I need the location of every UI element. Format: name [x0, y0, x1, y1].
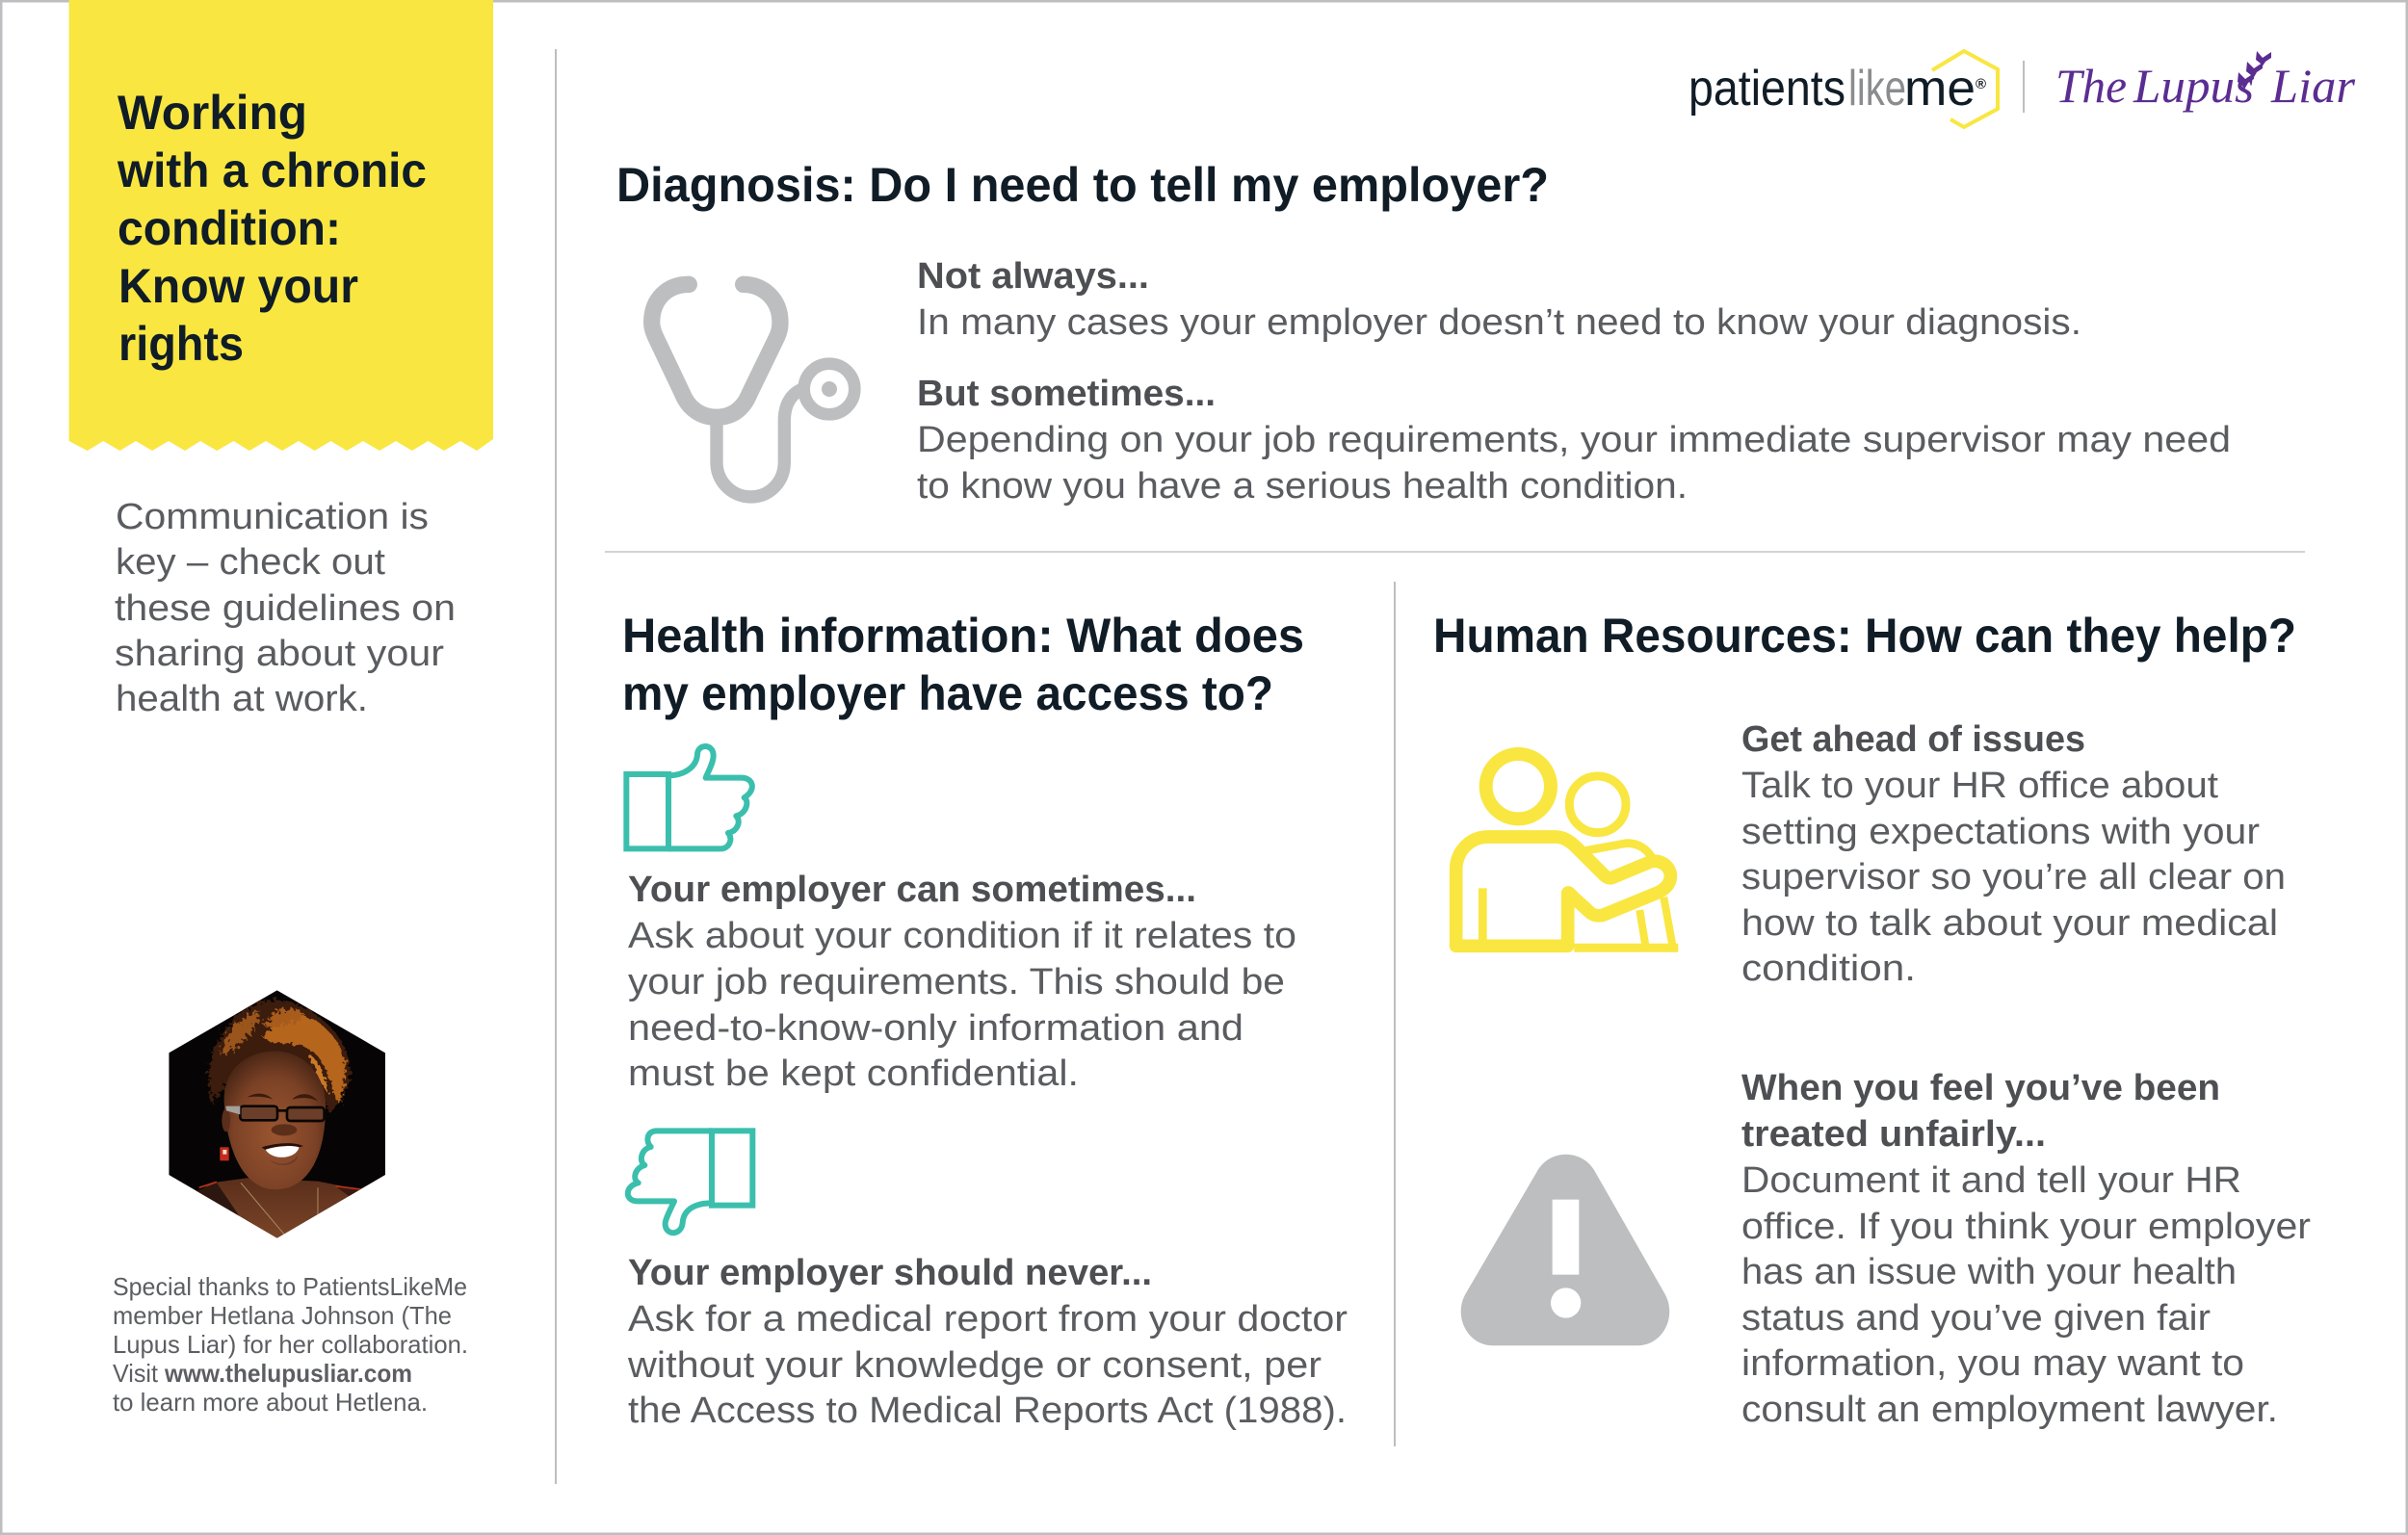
icon: thumbs up	[626, 746, 752, 848]
logo: The Lupus Liar: Liar	[2270, 59, 2356, 113]
title: Working	[118, 86, 307, 140]
text block: When you feel you've been treated unfairly: has an issue with your health	[1741, 1252, 2237, 1292]
heading: Health information: my employer have access to?	[622, 666, 1273, 720]
logo: PatientsLikeMe: patients	[1688, 61, 1845, 117]
icon: two people embracing	[1456, 754, 1678, 948]
logo: The Lupus Liar	[2055, 51, 2356, 113]
logo: PatientsLikeMe: like	[1848, 61, 1906, 117]
text block: Not always: Not always...	[917, 256, 1149, 297]
text block: But sometimes	[917, 374, 2231, 507]
text block: Your employer can sometimes: Your employer can sometimes...	[628, 870, 1196, 910]
logo: PatientsLikeMe	[1688, 51, 1998, 127]
text block: When you feel you've been treated unfairly: consult an employment lawyer.	[1741, 1390, 2278, 1430]
icon: warning triangle	[1461, 1155, 1669, 1345]
logo: The Lupus Liar: Lupus	[2133, 59, 2254, 113]
logo: PatientsLikeMe: ®	[1976, 76, 1986, 92]
intro text: health at work.	[116, 679, 368, 719]
text block: But sometimes: to know you have a serious health condition.	[917, 466, 1688, 507]
text block: Your employer should never: without your knowledge or consent, per	[627, 1345, 1322, 1386]
title: rights	[118, 317, 244, 371]
panel: yellow title banner	[69, 0, 493, 451]
text block: Your employer should never: Your employer should never...	[628, 1253, 1152, 1293]
text block: Get ahead of issues: Talk to your HR office about	[1741, 766, 2218, 806]
credit text: member Hetlana Johnson (The	[113, 1301, 452, 1330]
text block: When you feel you've been treated unfairly	[1741, 1068, 2311, 1430]
credit text: Special thanks to PatientsLikeMe	[113, 1272, 467, 1301]
credit text: www.thelupusliar.com	[164, 1359, 412, 1388]
text block: Your employer can sometimes: must be kept confidential.	[628, 1054, 1079, 1094]
text block: Your employer should never: Ask for a medical report from your doctor	[628, 1299, 1348, 1340]
intro text: sharing about your	[115, 634, 444, 674]
title: Know your	[118, 259, 358, 313]
text block: But sometimes: Depending on your job requirements, your immediate supervisor may need	[917, 420, 2231, 460]
title: condition:	[118, 201, 341, 255]
text block: Get ahead of issues: supervisor so you’re all clear on	[1741, 857, 2286, 898]
text block: Your employer should never	[627, 1253, 1348, 1431]
credit text: Visit	[113, 1359, 159, 1388]
text block: When you feel you've been treated unfairly: treated unfairly...	[1741, 1114, 2046, 1155]
credit text: Lupus Liar) for her collaboration.	[113, 1330, 468, 1359]
credit text: to learn more about Hetlena.	[113, 1388, 428, 1417]
heading: Health information: Health information: What does	[622, 609, 1304, 663]
intro text: Communication is	[116, 497, 429, 537]
text block: When you feel you've been treated unfairly: status and you’ve given fair	[1741, 1298, 2211, 1339]
text block: Get ahead of issues: how to talk about your medical	[1741, 903, 2278, 944]
logo: The Lupus Liar: The	[2055, 59, 2127, 113]
icon: thumbs down	[628, 1131, 752, 1233]
intro text: key – check out	[116, 542, 385, 583]
text block: Your employer can sometimes: Ask about your condition if it relates to	[628, 916, 1296, 956]
text block: Get ahead of issues: condition.	[1741, 949, 1916, 989]
text block: Your employer should never: the Access to Medical Reports Act (1988).	[628, 1391, 1347, 1431]
text block: Your employer can sometimes: your job requirements. This should be	[628, 962, 1285, 1002]
text block: Get ahead of issues: Get ahead of issues	[1741, 719, 2085, 760]
heading: Diagnosis: Diagnosis: Do I need to tell my employer?	[616, 158, 1549, 212]
title	[117, 86, 427, 371]
logo: PatientsLikeMe: me	[1904, 61, 1976, 117]
text block: When you feel you've been treated unfairly: office. If you think your employer	[1741, 1207, 2311, 1247]
intro text: these guidelines on	[115, 588, 456, 629]
portrait: Hetlana Johnson hexagon photo	[169, 990, 385, 1238]
text block: Get ahead of issues: setting expectations with your	[1741, 812, 2260, 852]
credit text	[113, 1272, 468, 1417]
title: with a chronic	[117, 143, 427, 197]
icon: stethoscope	[652, 284, 854, 497]
text block: When you feel you've been treated unfairly: When you feel you’ve been	[1741, 1068, 2220, 1108]
heading: Human Resources: Human Resources: How can they help?	[1433, 609, 2296, 663]
text block: Not always	[917, 256, 2081, 343]
text block: But sometimes: But sometimes...	[917, 374, 1216, 414]
text block: Not always: In many cases your employer doesn’t need to know your diagnosis.	[917, 302, 2081, 343]
text block: Your employer can sometimes	[628, 870, 1296, 1094]
text block: Get ahead of issues	[1741, 719, 2286, 989]
text block: When you feel you've been treated unfairly: information, you may want to	[1741, 1343, 2244, 1384]
intro text	[115, 497, 456, 719]
text block: Your employer can sometimes: need-to-know-only information and	[628, 1008, 1243, 1049]
heading: Health information	[622, 609, 1304, 720]
text block: When you feel you've been treated unfairly: Document it and tell your HR	[1741, 1160, 2241, 1201]
